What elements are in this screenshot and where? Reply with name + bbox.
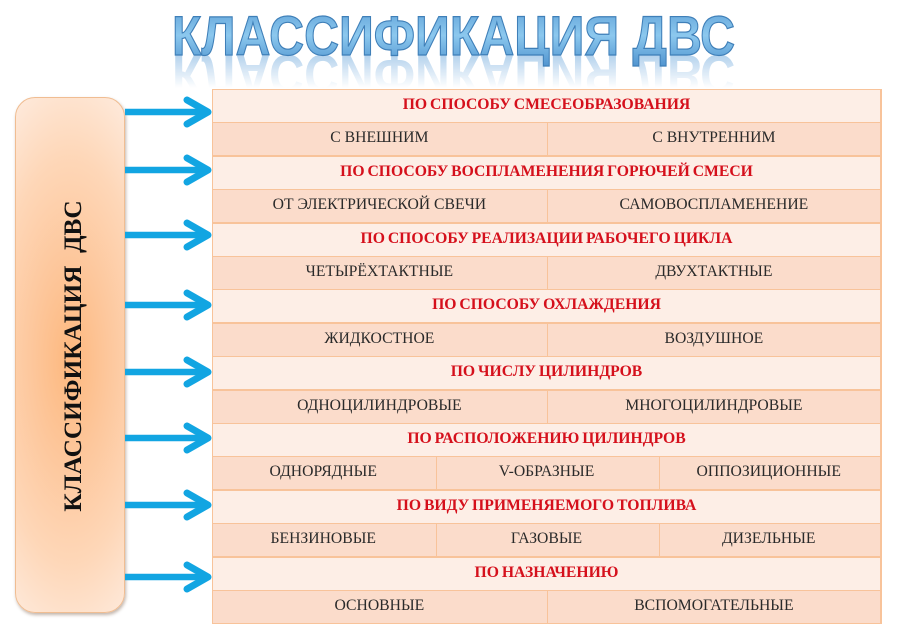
arrow 2 bbox=[125, 158, 208, 182]
row: ignition options: САМОВОСПЛАМЕНЕНИЕ bbox=[620, 196, 808, 213]
row: cylinder count options bbox=[213, 391, 880, 423]
row: fuel options: ДИЗЕЛЬНЫЕ bbox=[722, 530, 816, 547]
row: cooling options: ВОЗДУШНОЕ bbox=[664, 330, 763, 347]
row heading: ignition bbox=[213, 157, 880, 189]
row: cooling options bbox=[213, 324, 880, 356]
row heading: cylinder count: ПО ЧИСЛУ ЦИЛИНДРОВ bbox=[451, 363, 642, 380]
row: purpose options: ОСНОВНЫЕ bbox=[335, 597, 424, 614]
row: cylinder layout options: V-ОБРАЗНЫЕ bbox=[499, 463, 594, 480]
row heading: working cycle bbox=[213, 224, 880, 256]
row: cooling options: ЖИДКОСТНОЕ bbox=[324, 330, 434, 347]
row: fuel options: БЕНЗИНОВЫЕ bbox=[270, 530, 376, 547]
row: ignition options: ОТ ЭЛЕКТРИЧЕСКОЙ СВЕЧИ bbox=[273, 196, 486, 213]
arrow 5 bbox=[125, 360, 208, 384]
row: fuel options: ГАЗОВЫЕ bbox=[511, 530, 582, 547]
row heading: purpose bbox=[213, 558, 880, 590]
row heading: mixture formation: ПО СПОСОБУ СМЕСЕОБРАЗОВАНИЯ bbox=[403, 96, 690, 113]
row heading: cooling bbox=[213, 290, 880, 322]
row: cylinder layout options: ОППОЗИЦИОННЫЕ bbox=[697, 463, 841, 480]
arrows bbox=[125, 96, 212, 592]
row heading: ignition: ПО СПОСОБУ ВОСПЛАМЕНЕНИЯ ГОРЮЧЕЙ СМЕСИ bbox=[340, 163, 753, 180]
arrow 6 bbox=[125, 426, 208, 450]
row heading: cylinder layout: ПО РАСПОЛОЖЕНИЮ ЦИЛИНДРОВ bbox=[407, 430, 686, 447]
table: classification bbox=[212, 89, 882, 624]
row heading: cooling: ПО СПОСОБУ ОХЛАЖДЕНИЯ bbox=[432, 296, 661, 313]
row: cylinder count options: МНОГОЦИЛИНДРОВЫЕ bbox=[625, 397, 802, 414]
row: working cycle options bbox=[213, 257, 880, 289]
arrow 7 bbox=[125, 493, 208, 517]
row heading: cylinder layout bbox=[213, 424, 880, 456]
row heading: purpose: ПО НАЗНАЧЕНИЮ bbox=[475, 564, 618, 581]
row heading: mixture formation bbox=[213, 90, 880, 122]
row: mixture formation options: С ВНЕШНИМ bbox=[330, 129, 428, 146]
row: fuel options bbox=[213, 524, 880, 556]
row: working cycle options: ЧЕТЫРЁХТАКТНЫЕ bbox=[306, 263, 453, 280]
panel: left label box bbox=[15, 97, 125, 613]
row heading: fuel: ПО ВИДУ ПРИМЕНЯЕМОГО ТОПЛИВА bbox=[397, 497, 696, 514]
arrow 1 bbox=[125, 100, 208, 124]
row: cylinder layout options: ОДНОРЯДНЫЕ bbox=[270, 463, 377, 480]
row: mixture formation options: С ВНУТРЕННИМ bbox=[652, 129, 775, 146]
arrow 8 bbox=[125, 565, 208, 589]
row heading: working cycle: ПО СПОСОБУ РЕАЛИЗАЦИИ РАБОЧЕГО ЦИКЛА bbox=[361, 230, 732, 247]
row: working cycle options: ДВУХТАКТНЫЕ bbox=[655, 263, 772, 280]
row: cylinder layout options bbox=[213, 457, 880, 489]
row: purpose options bbox=[213, 591, 880, 623]
arrow 3 bbox=[125, 223, 208, 247]
row: cylinder count options: ОДНОЦИЛИНДРОВЫЕ bbox=[297, 397, 462, 414]
row: purpose options: ВСПОМОГАТЕЛЬНЫЕ bbox=[634, 597, 794, 614]
label: side text: КЛАССИФИКАЦИЯ ДВС bbox=[59, 200, 87, 512]
row heading: cylinder count bbox=[213, 357, 880, 389]
row: mixture formation options bbox=[213, 123, 880, 155]
arrow 4 bbox=[125, 293, 208, 317]
row: ignition options bbox=[213, 190, 880, 222]
row heading: fuel bbox=[213, 491, 880, 523]
